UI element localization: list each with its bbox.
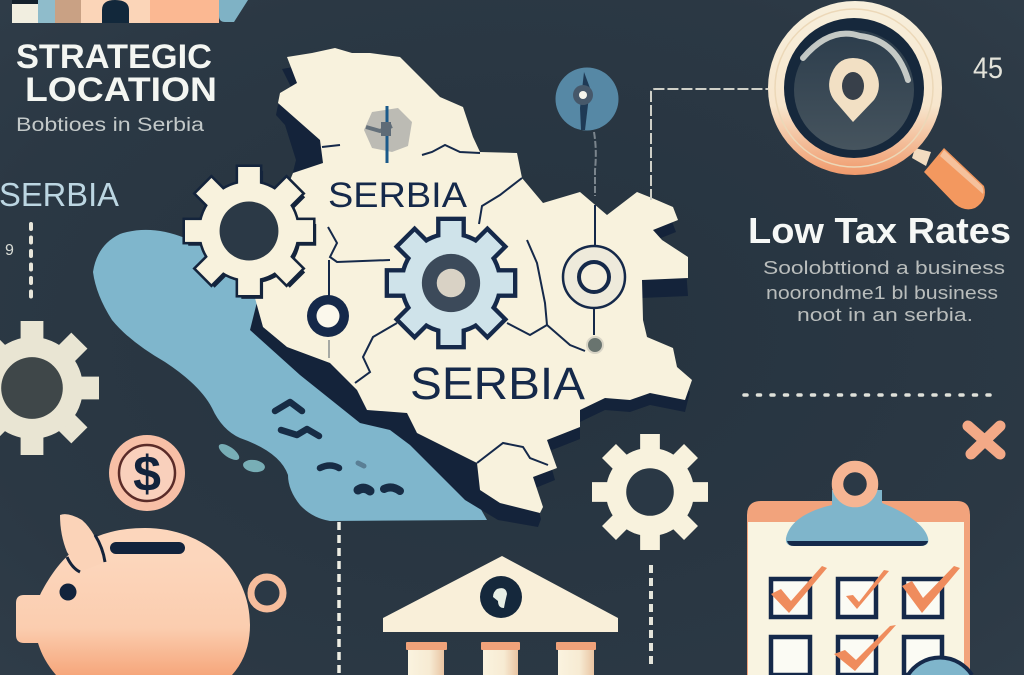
dashed line: right gear — [649, 565, 653, 668]
left label: Serbia: SERBIA — [0, 176, 119, 213]
heading: strategic location — [16, 38, 217, 109]
body text: noorondme1 bl business — [766, 283, 998, 303]
gear: centre blue — [389, 221, 513, 345]
dashed line: centre bottom — [337, 522, 341, 675]
coin: $ — [133, 446, 161, 502]
dotted line: left — [29, 224, 33, 302]
bank building — [383, 556, 618, 675]
x mark — [968, 426, 1000, 454]
body text: noot in an serbia. — [797, 305, 973, 325]
connector: small node — [587, 309, 603, 353]
checkboxes — [771, 579, 942, 675]
dotted line: right — [744, 393, 994, 397]
check marks — [771, 566, 960, 671]
dashed line: callout to magnifier — [651, 89, 768, 200]
heading: strategic location: STRATEGIC — [16, 38, 212, 76]
top-left building illustration — [12, 0, 248, 23]
map shadow — [250, 60, 690, 527]
pin: blue circle — [556, 68, 618, 130]
clipboard — [747, 466, 972, 675]
heading: low tax rates: Low Tax Rates — [748, 210, 1011, 251]
subheading: Bobtioes in Serbia — [16, 115, 205, 136]
sea islands — [275, 402, 400, 491]
sea — [93, 230, 487, 521]
body text — [763, 258, 1005, 325]
magnifying glass — [768, 1, 985, 209]
map borders — [322, 145, 585, 465]
columns — [408, 648, 594, 675]
node circle — [307, 295, 349, 337]
piggy bank — [16, 514, 283, 675]
map of Serbia — [250, 48, 692, 513]
blue seal — [908, 657, 972, 675]
body text: Soolobttiond a business — [763, 258, 1005, 278]
map label lower: SERBIA — [410, 358, 585, 409]
small left glyph: 9 — [5, 242, 14, 259]
map compass pin — [364, 106, 412, 163]
heading: strategic location: LOCATION — [25, 71, 217, 109]
gear: left edge — [0, 321, 99, 455]
connector from pin to target — [594, 132, 596, 196]
pale islands — [216, 441, 266, 473]
coin — [109, 435, 185, 511]
clip — [786, 466, 928, 546]
map labels: SERBIA — [328, 176, 468, 215]
gear: bottom right — [592, 434, 708, 550]
target circle — [563, 246, 625, 308]
small number: 45 — [973, 52, 1003, 85]
gear: map left — [185, 167, 316, 299]
